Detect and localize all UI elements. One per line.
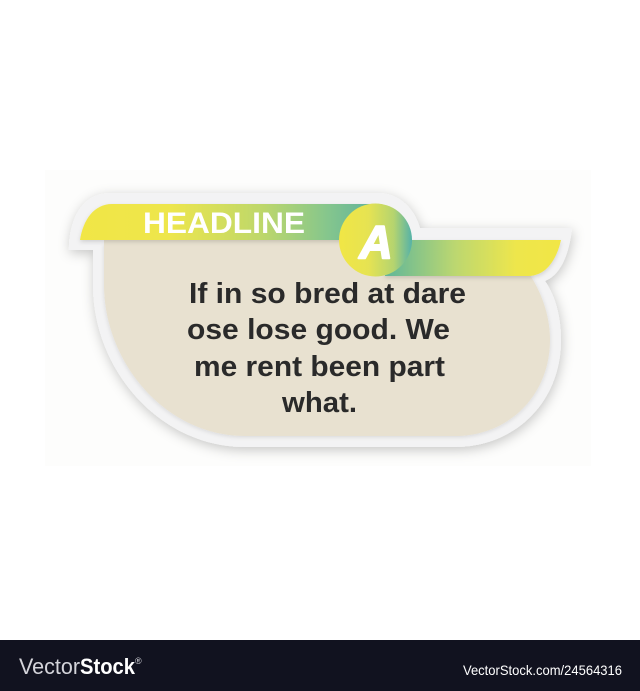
footer logo: Stock — [80, 654, 136, 679]
footer logo — [19, 654, 142, 679]
faint background panel — [45, 170, 591, 466]
body text: me rent been part — [194, 351, 445, 383]
headline text: HEADLINE — [143, 207, 305, 240]
white card outline — [69, 193, 572, 447]
body text: ose lose good. We — [187, 314, 450, 346]
footer logo: ® — [135, 656, 142, 666]
body text: If in so bred at dare — [189, 278, 466, 310]
beige fill beneath the left banner — [104, 238, 404, 268]
badge circle with letter — [339, 204, 412, 276]
body text: what. — [281, 387, 357, 419]
footer URL: VectorStock.com/24564316 — [463, 662, 622, 678]
callout card — [69, 193, 572, 447]
body text — [187, 278, 466, 419]
left headline banner — [80, 204, 375, 240]
letter A: A — [358, 216, 393, 268]
right banner — [385, 240, 561, 276]
footer logo: Vector — [19, 654, 80, 679]
footer bar — [0, 640, 640, 691]
beige body panel — [104, 244, 550, 436]
